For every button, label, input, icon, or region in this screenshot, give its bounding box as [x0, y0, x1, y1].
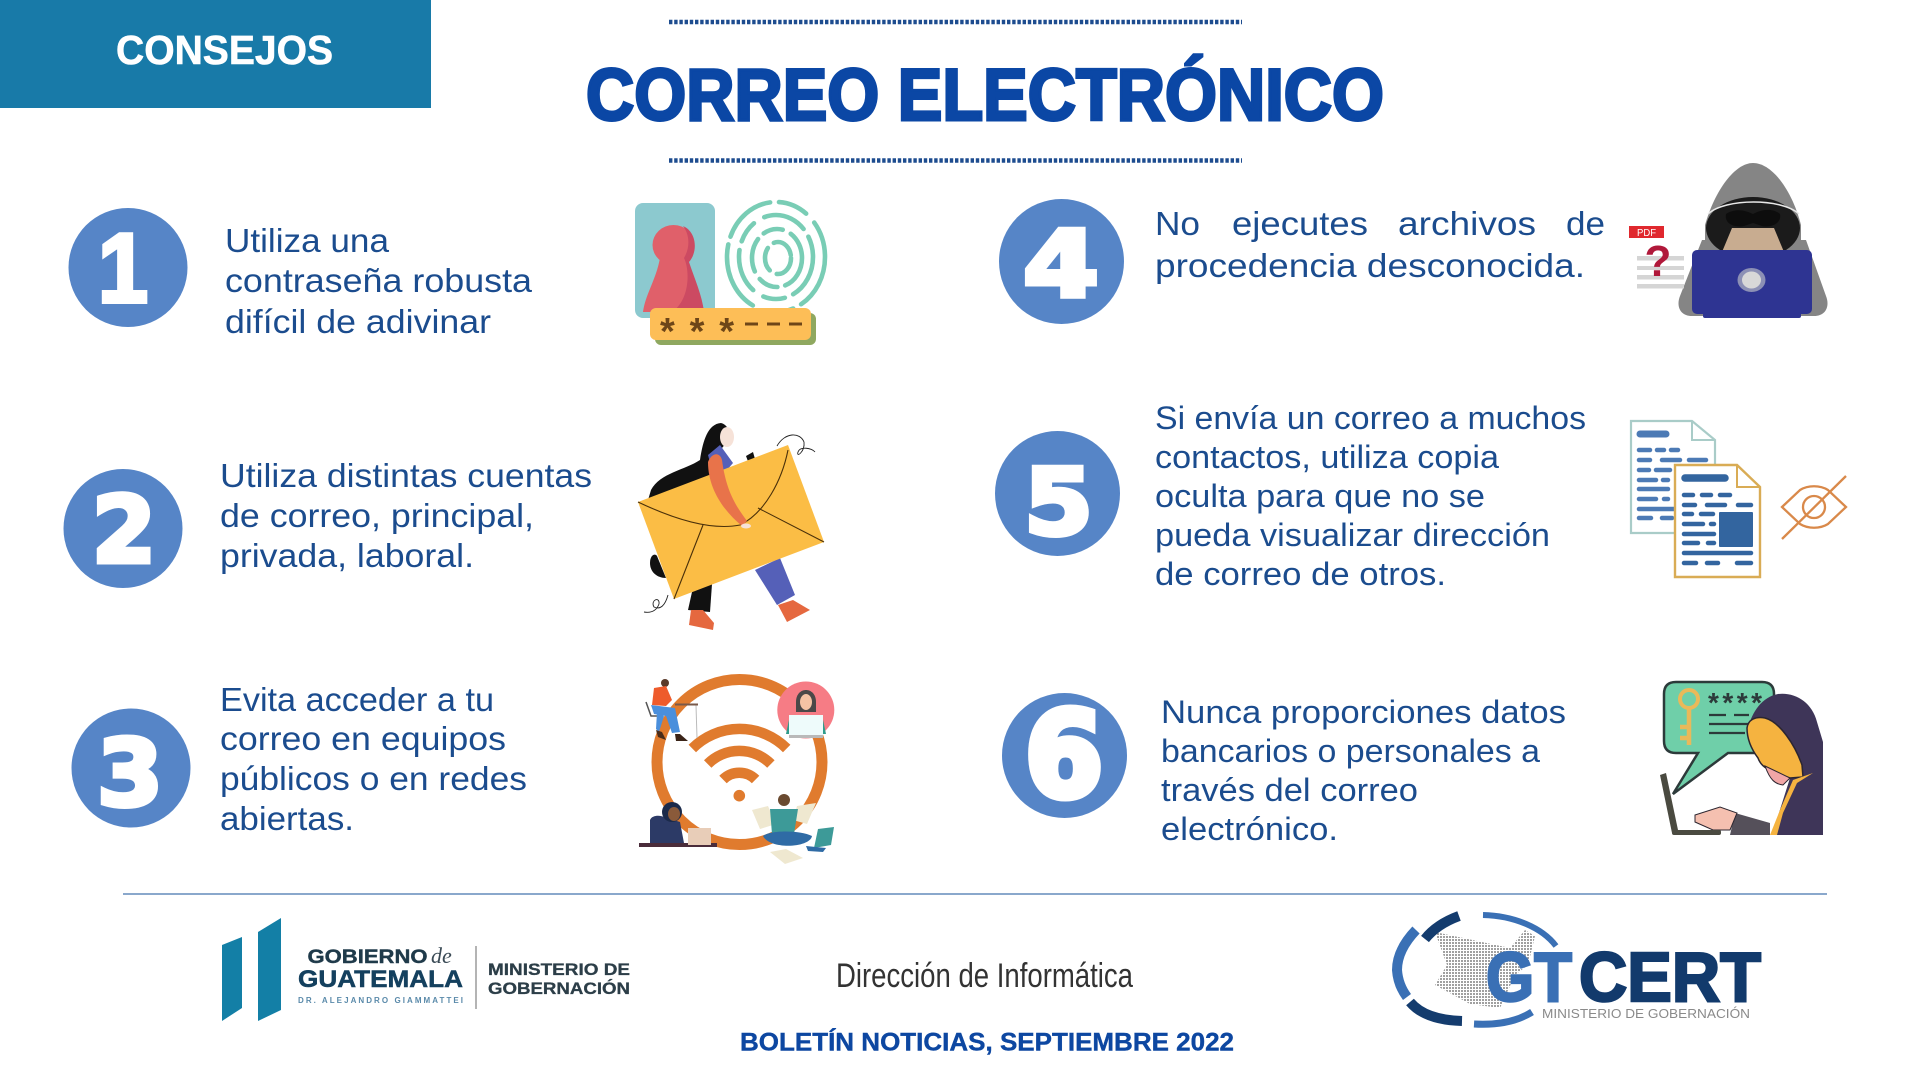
banner: consejos [0, 0, 431, 108]
logo: gobierno de guatemala: GOBIERNO [308, 947, 428, 968]
text: tip 3: abiertas. [220, 800, 354, 837]
text: tip 2: de correo, principal, [220, 497, 534, 534]
panel: tip 5 [995, 400, 1846, 592]
title: CORREO ELECTRÓNICO [586, 55, 1384, 136]
text: tip 3: correo en equipos [220, 720, 506, 757]
text: tip 5: Si envía un correo a muchos [1155, 400, 1586, 436]
text: tip 2: Utiliza distintas cuentas [220, 457, 592, 494]
number badge 4 [999, 199, 1124, 324]
text: tip 6 [1161, 694, 1566, 847]
text: tip 4 [1155, 205, 1605, 284]
text: tip 3 [220, 681, 527, 837]
text: tip 3: públicos o en redes [220, 760, 527, 797]
icon: hooded hacker with laptop and pdf: PDF [1637, 228, 1656, 239]
number badge 5 [995, 431, 1120, 556]
text: tip 6: Nunca proporciones datos [1161, 694, 1566, 730]
text: tip 5: de correo de otros. [1155, 556, 1446, 592]
number badge 6 [1002, 686, 1127, 824]
panel: tip 2 [64, 423, 824, 630]
panel: tip 1 [68, 202, 825, 353]
logo: gtcert [1397, 915, 1761, 1024]
text: tip 1 [225, 222, 533, 340]
text: tip 6: través del correo [1161, 772, 1418, 808]
text: tip 1: Utiliza una [225, 222, 390, 259]
text: tip 2: privada, laboral. [220, 537, 474, 574]
icon: woman carrying envelope [638, 423, 824, 630]
number badge 2: 2 [92, 477, 156, 584]
banner: consejos: CONSEJOS [116, 27, 333, 73]
number badge 1 [68, 208, 188, 327]
icon: hooded figure with key bubble [1660, 682, 1823, 835]
text: boletin noticias: BOLETÍN NOTICIAS, SEPTIEMBRE 2022 [740, 1028, 1234, 1056]
text: tip 1: contraseña robusta [225, 262, 533, 299]
icon: profile, fingerprint and password [635, 202, 825, 353]
icon: documents and crossed eye [1631, 421, 1846, 577]
logo: gtcert: CERT [1579, 938, 1761, 1016]
text: tip 4: archivos [1398, 205, 1536, 242]
text: tip 5 [1155, 400, 1586, 592]
panel: tip 4 [999, 163, 1828, 324]
text: tip 4: de [1566, 205, 1605, 242]
text: tip 1: difícil de adivinar [225, 303, 491, 340]
panel: tip 3 [72, 679, 834, 864]
text: tip 5: pueda visualizar dirección [1155, 517, 1550, 553]
text: direccion de informatica: Dirección de Informática [836, 957, 1133, 995]
icon: profile, fingerprint and password: *** [660, 311, 734, 353]
logo: gobierno de guatemala [222, 918, 630, 1021]
number badge 1: 1 [98, 213, 148, 323]
panel: tip 6 [1002, 682, 1823, 847]
number badge 6: 6 [1025, 686, 1103, 824]
icon: hooded hacker with laptop and pdf [1629, 163, 1828, 318]
number badge 3: 3 [97, 720, 163, 827]
text: tip 4: No [1155, 205, 1200, 242]
text: tip 4: procedencia desconocida. [1155, 247, 1585, 284]
logo: gobierno de guatemala: GUATEMALA [298, 966, 463, 993]
logo: gobierno de guatemala: DR. ALEJANDRO GIAMMATTEI [298, 996, 463, 1005]
number badge 5: 5 [1024, 449, 1093, 556]
text: tip 5: oculta para que no se [1155, 478, 1485, 514]
text: tip 2 [220, 457, 592, 574]
text: tip 4: ejecutes [1232, 205, 1368, 242]
text: tip 3: Evita acceder a tu [220, 681, 494, 718]
icon: hooded hacker with laptop and pdf: ? [1645, 237, 1671, 286]
icon: wifi ring with people [639, 679, 834, 864]
logo: gobierno de guatemala: MINISTERIO DE [488, 961, 630, 979]
text: tip 6: electrónico. [1161, 811, 1338, 847]
logo: gtcert: MINISTERIO DE GOBERNACIÓN [1542, 1006, 1750, 1021]
number badge 3 [72, 708, 190, 828]
text: tip 5: contactos, utiliza copia [1155, 439, 1499, 475]
logo: gtcert: GT [1486, 938, 1572, 1016]
number badge 4: 4 [1023, 211, 1099, 318]
logo: gobierno de guatemala: GOBERNACIÓN [488, 979, 630, 998]
text: tip 6: bancarios o personales a [1161, 733, 1540, 769]
logo: gobierno de guatemala: de [431, 943, 452, 968]
icon: hooded figure with key bubble: **** [1708, 687, 1762, 718]
number badge 2 [64, 469, 182, 588]
